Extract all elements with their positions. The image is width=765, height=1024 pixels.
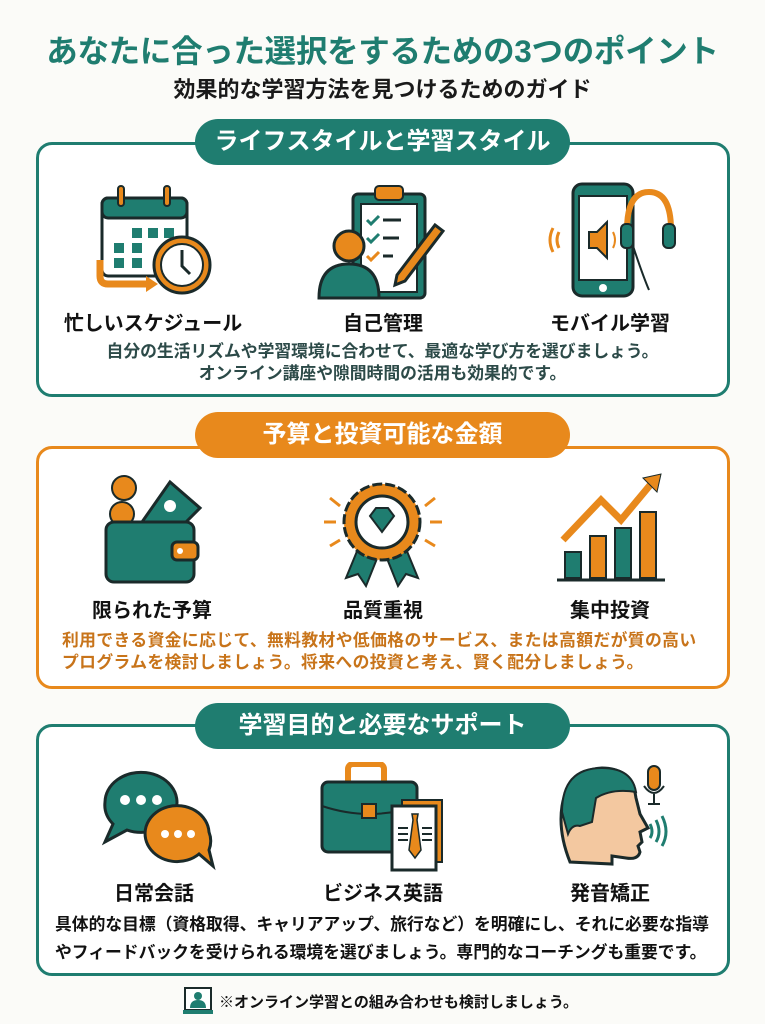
subtitle: 効果的な学習方法を見つけるためのガイド	[173, 77, 592, 102]
panel: lifestyle	[36, 142, 730, 397]
footer text: ※オンライン学習との組み合わせも検討しましょう。	[219, 994, 578, 1011]
label: limited budget: 限られた予算	[92, 600, 212, 622]
panel: budget	[36, 446, 730, 689]
icon: briefcase documents	[320, 762, 443, 872]
label: quality: 品質重視	[343, 600, 423, 622]
text: purpose description: 具体的な目標（資格取得、キャリアアップ、旅行など）を明確にし、それに必要な指導	[55, 915, 709, 934]
footer note	[183, 987, 578, 1014]
icon: growth chart	[557, 473, 665, 582]
label: business english: ビジネス英語	[323, 883, 443, 905]
text: purpose description	[55, 915, 709, 962]
pill: purpose heading: 学習目的と必要なサポート	[238, 712, 526, 739]
icon: mobile learning	[548, 182, 676, 298]
icon: speech bubbles	[102, 770, 216, 870]
icon: quality badge	[324, 482, 442, 588]
text: budget description	[62, 631, 697, 672]
pill: lifestyle heading	[195, 119, 570, 165]
pill: purpose heading	[195, 703, 570, 749]
text: budget description: 利用できる資金に応じて、無料教材や低価格のサービス、または高額だが質の高い	[62, 631, 697, 650]
text: lifestyle description: 自分の生活リズムや学習環境に合わせて、最適な学び方を選びましょう。	[107, 342, 658, 361]
text: lifestyle description	[107, 342, 658, 383]
icon: calendar clock	[96, 185, 212, 294]
label: pronunciation: 発音矯正	[570, 883, 650, 905]
label: daily conversation: 日常会話	[114, 883, 194, 905]
pill: budget heading	[195, 412, 570, 458]
pill: budget heading: 予算と投資可能な金額	[262, 421, 502, 448]
icon: wallet	[104, 475, 202, 584]
label: busy schedule: 忙しいスケジュール	[64, 313, 242, 335]
text: budget description: プログラムを検討しましょう。将来への投資と考え、賢く配分しましょう。	[62, 653, 644, 672]
text: purpose description: やフィードバックを受けられる環境を選びましょう。専門的なコーチングも重要です。	[55, 943, 706, 962]
icon: pronunciation head	[560, 765, 668, 866]
icon: online learning screen	[183, 987, 213, 1014]
icon: clipboard person	[318, 185, 445, 300]
panel: purpose	[36, 724, 730, 976]
label: focused investment: 集中投資	[570, 600, 650, 622]
text: lifestyle description: オンライン講座や隙間時間の活用も効果的です。	[199, 364, 566, 383]
pill: lifestyle heading: ライフスタイルと学習スタイル	[214, 128, 550, 155]
label: self management: 自己管理	[343, 313, 423, 335]
label: mobile learning: モバイル学習	[550, 313, 670, 335]
title: あなたに合った選択をするための3つのポイント	[46, 33, 719, 69]
